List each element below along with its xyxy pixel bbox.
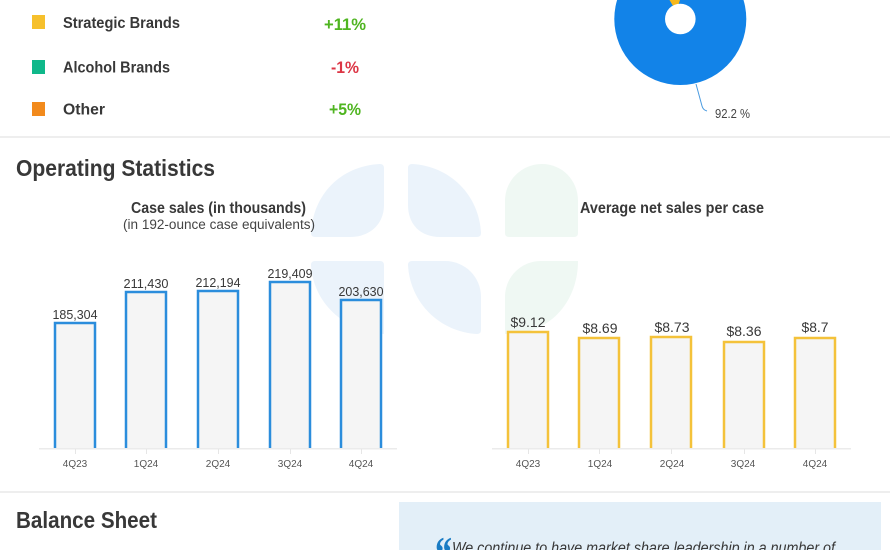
bar chart: case sales: 212,194 — [196, 275, 240, 290]
heading: Operating Statistics: Operating Statistics — [16, 155, 215, 181]
bar chart: average net sales per case: $8.73 — [654, 319, 690, 335]
bar chart: average net sales per case: 3Q24 — [731, 459, 756, 470]
bar chart: case sales: 4Q23 — [63, 459, 88, 470]
legend and growth table — [32, 15, 366, 119]
bar chart: case sales: 211,430 — [124, 276, 168, 291]
legend row: Alcohol Brands: Alcohol Brands — [63, 60, 170, 76]
legend row: Other: Other — [63, 102, 105, 118]
bar chart: average net sales per case: 1Q24 — [588, 459, 613, 470]
chart title: case sales — [123, 200, 315, 232]
bar chart: average net sales per case: 4Q23 — [516, 459, 541, 470]
legend row: Strategic Brands — [32, 15, 366, 34]
chart title: average net sales: Average net sales per case — [580, 200, 764, 217]
bar chart: case sales: 1Q24 — [134, 459, 159, 470]
legend row: Alcohol Brands — [32, 58, 359, 77]
legend row: Alcohol Brands: -1% — [331, 58, 359, 77]
legend row: Other: +5% — [329, 100, 361, 119]
bar chart: average net sales per case: $8.7 — [802, 319, 829, 335]
quote panel — [399, 502, 881, 550]
bar chart: case sales: 3Q24 — [278, 459, 303, 470]
chart title: case sales: Case sales (in thousands) — [131, 200, 306, 217]
legend row: Other — [32, 100, 361, 119]
bar chart: case sales: 185,304 — [52, 307, 98, 322]
bar chart: case sales: 2Q24 — [206, 459, 231, 470]
bar chart: case sales: 219,409 — [268, 266, 312, 281]
bar chart: average net sales per case: 4Q24 — [803, 459, 828, 470]
legend row: Strategic Brands: +11% — [324, 15, 366, 34]
donut chart — [614, 0, 750, 121]
bar chart: case sales — [39, 266, 397, 470]
bar chart: average net sales per case: $9.12 — [510, 314, 546, 330]
bar chart: case sales: 4Q24 — [349, 459, 374, 470]
legend row: Strategic Brands: Strategic Brands — [63, 15, 180, 32]
bar chart: case sales: 203,630 — [338, 284, 384, 299]
bar chart: average net sales per case: $8.69 — [582, 320, 618, 336]
bar chart: average net sales per case — [492, 314, 851, 470]
bar chart: average net sales per case: 2Q24 — [660, 459, 685, 470]
heading: Balance Sheet: Balance Sheet — [16, 507, 157, 533]
donut chart: 92.2 % — [715, 107, 750, 121]
bar chart: average net sales per case: $8.36 — [726, 323, 762, 339]
watermark logo — [311, 164, 578, 334]
chart title: case sales: (in 192-ounce case equivalents) — [123, 217, 315, 232]
